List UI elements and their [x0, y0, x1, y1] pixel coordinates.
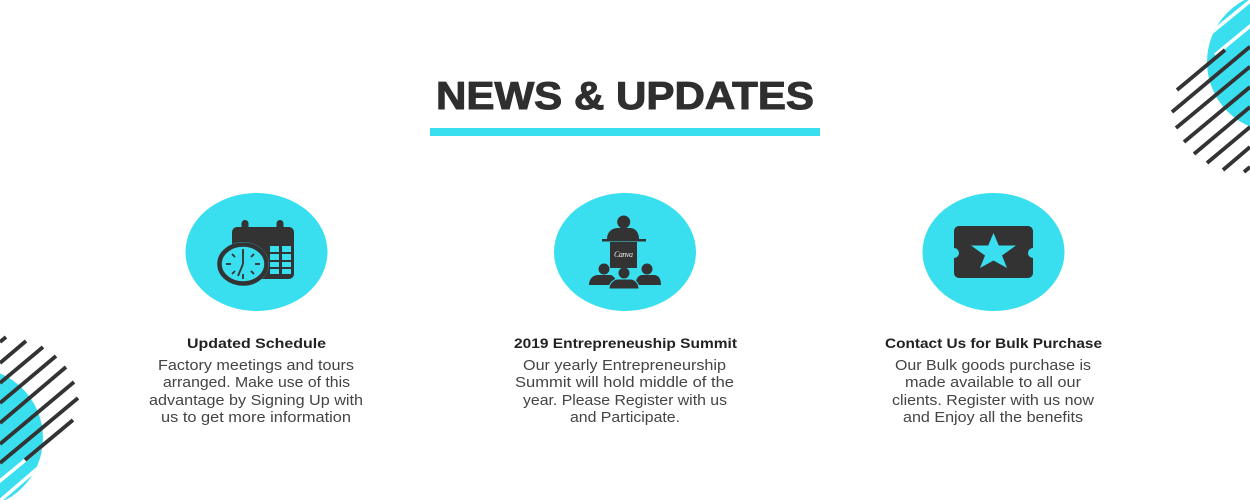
icon: calendar and clock: [186, 193, 328, 311]
body text: Factory meetings and tours: [158, 358, 354, 374]
body text: [515, 358, 734, 426]
body text: Our yearly Entrepreneurship: [523, 358, 726, 374]
body text: Summit will hold middle of the: [515, 375, 734, 391]
panel: updated schedule: [149, 193, 363, 426]
body text: [149, 358, 363, 426]
icon: ticket with star: [922, 193, 1064, 311]
body text: and Enjoy all the benefits: [903, 410, 1083, 426]
body text: [892, 358, 1095, 426]
body text: year. Please Register with us: [523, 393, 727, 409]
body text: arranged. Make use of this: [163, 375, 350, 391]
icon: speaker at podium: Canva: [614, 250, 633, 259]
decoration: top right circles: [1172, 0, 1250, 172]
panel: entrepreneurship summit: [514, 193, 737, 426]
decoration: bottom left circles: [0, 337, 78, 500]
body text: us to get more information: [161, 410, 351, 426]
title underline: [430, 128, 820, 136]
panel: bulk purchase: [885, 193, 1102, 426]
body text: made available to all our: [905, 375, 1081, 391]
heading: Updated Schedule: [187, 335, 326, 351]
body text: advantage by Signing Up with: [149, 393, 363, 409]
body text: clients. Register with us now: [892, 393, 1095, 409]
title: NEWS & UPDATES: [436, 75, 814, 118]
icon: speaker at podium: [554, 193, 696, 311]
heading: 2019 Entrepreneuship Summit: [514, 335, 737, 351]
heading: Contact Us for Bulk Purchase: [885, 335, 1102, 351]
body text: Our Bulk goods purchase is: [895, 358, 1091, 374]
body text: and Participate.: [570, 410, 680, 426]
